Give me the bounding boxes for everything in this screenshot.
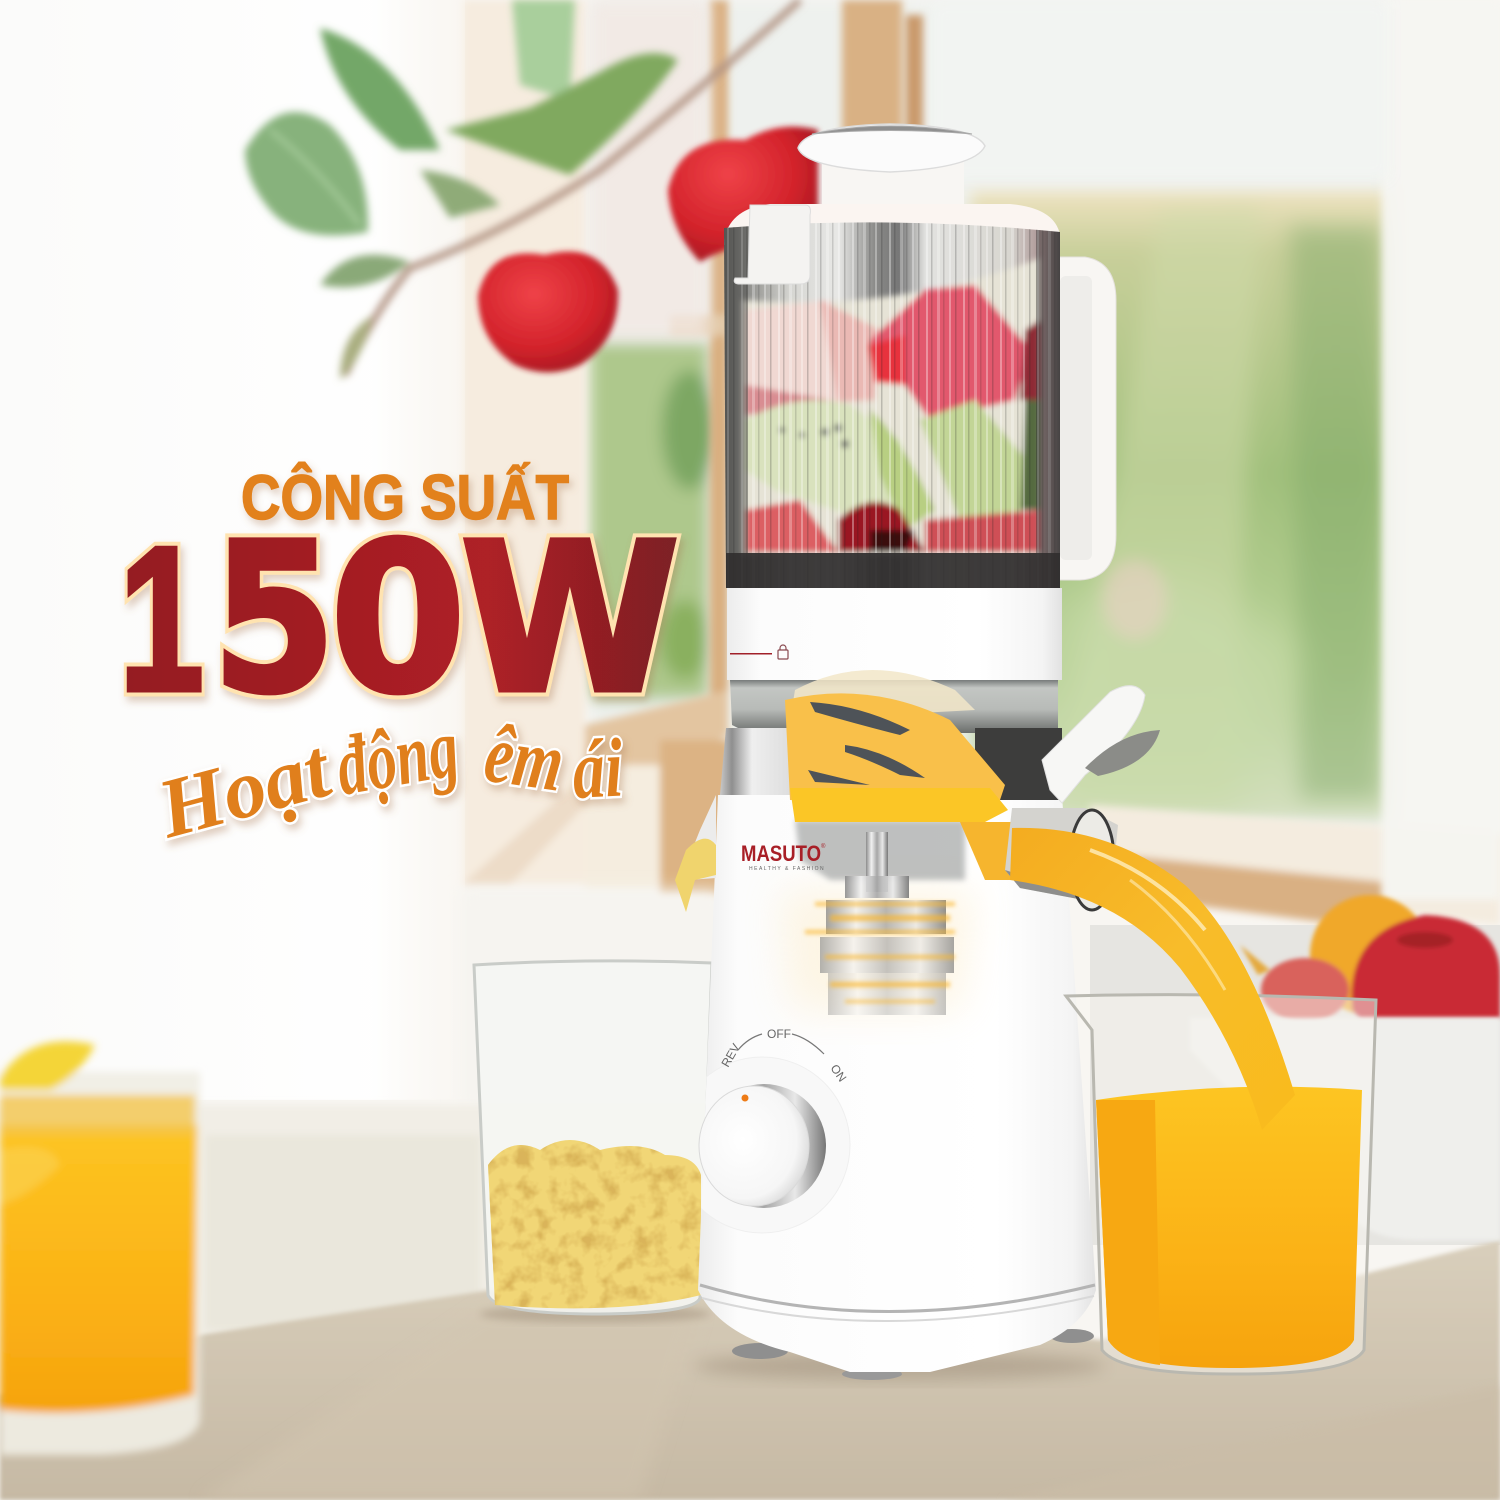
heading: 150W: 1 (119, 504, 204, 734)
heading: 150W: W (460, 499, 680, 739)
juicer transparent jar with fruit (724, 205, 1060, 588)
juicer base rim (700, 1285, 1095, 1321)
juicer metal ring (720, 728, 1062, 800)
juicer (674, 124, 1160, 1380)
juice spout (1005, 808, 1118, 910)
icon: apple left (478, 252, 618, 372)
juice stream (1010, 828, 1295, 1130)
heading: 150W: 5 (212, 499, 336, 739)
juicer jar clip (734, 205, 810, 284)
heading: công suất: CÔNG SUẤT (241, 462, 569, 533)
juicer auger with yellow pulp (785, 670, 1025, 880)
control dial labels: REV (718, 1041, 743, 1070)
script slogan: ái (570, 721, 625, 817)
juicer base feet (732, 1329, 1094, 1380)
background: wooden window frame (462, 0, 1500, 930)
control knob (698, 1056, 850, 1234)
juicer main body (698, 795, 1096, 1372)
juicer clear chamber ring (730, 680, 1058, 733)
brand logo: ® (821, 843, 826, 850)
script slogan: động (329, 701, 465, 814)
juicer feed chute and lid (724, 124, 1060, 245)
control dial labels (718, 1027, 849, 1084)
heading: 150W: 1 (119, 504, 204, 734)
glass with pulp (474, 961, 712, 1314)
script slogan: Hoạt (148, 721, 342, 857)
table surface (0, 925, 1500, 1500)
heading: 150W: W (460, 499, 680, 739)
juicer white collar with lock mark (727, 588, 1062, 680)
glass of juice left (0, 1041, 200, 1455)
icon: apple right (668, 127, 818, 262)
control dial labels: ON (828, 1062, 849, 1084)
background: green field through window (590, 0, 1390, 830)
heading: 150W: 0 (330, 499, 466, 739)
juicer motor cutaway (780, 820, 975, 1015)
branch with leaves and apples (245, 0, 818, 380)
background: white curtains (0, 0, 465, 1100)
heading: 150W: 0 (330, 499, 466, 739)
juicer handle (1050, 257, 1116, 580)
heading: 150W (119, 499, 680, 739)
fruit bowl (1190, 895, 1500, 1240)
control dial labels: OFF (767, 1027, 791, 1041)
pulp (488, 1140, 701, 1308)
script slogan: êm (479, 707, 570, 810)
script slogan (148, 701, 625, 857)
juicer pulp outlet left (675, 795, 716, 912)
heading: 150W: 5 (212, 499, 336, 739)
measuring jug with juice (1066, 995, 1376, 1374)
spout stopper cap (1042, 686, 1160, 803)
brand logo: HEALTHY & FASHION (749, 866, 825, 872)
brand logo: MASUTO (741, 841, 821, 866)
